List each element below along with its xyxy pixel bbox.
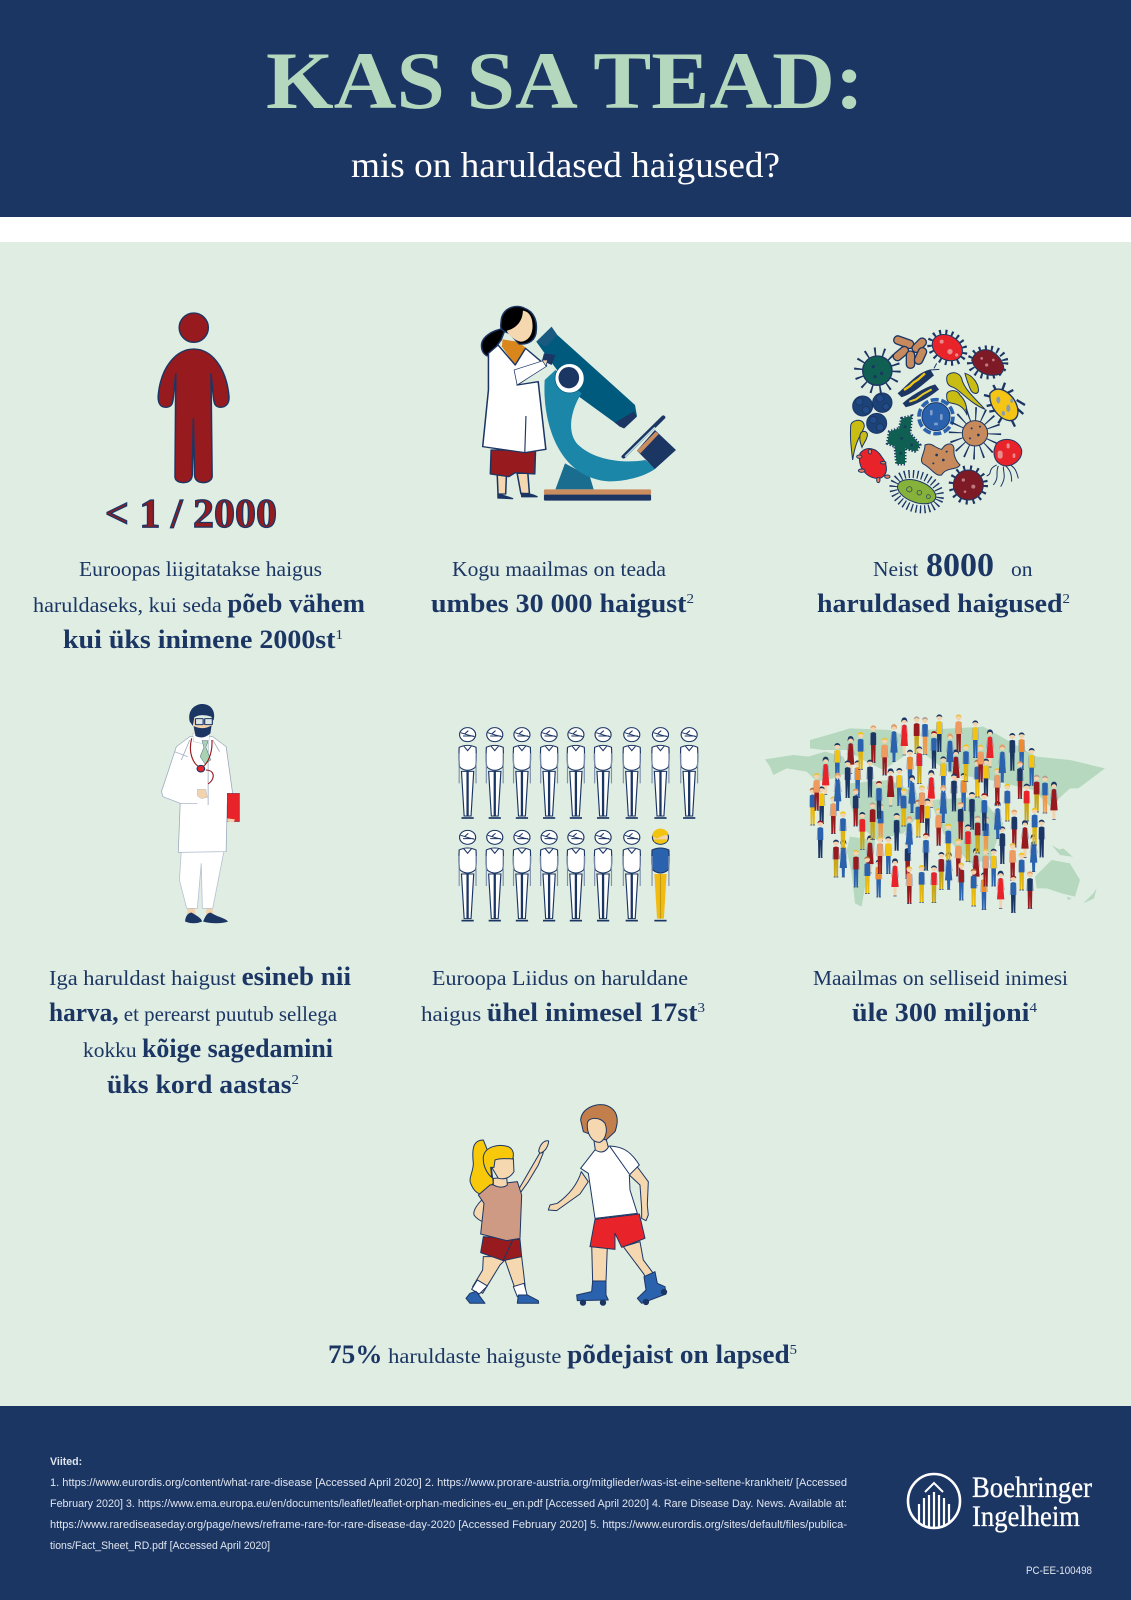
statistic: less than 1 in 2000: < 1 / 2000: [105, 490, 277, 536]
icon: red person: [158, 313, 229, 483]
head: [194, 718, 212, 737]
text: definition: haruldaseks, kui seda põeb vähem: [33, 589, 365, 618]
tan spiky star: [956, 415, 994, 452]
references: 1. https://www.eurordis.org/content/what-rare-disease [Accessed April 2020] 2. https://www.prorare-austria.org/mitglieder/was-ist-eine-seltene-krankheit/ [Accessed: [50, 1477, 847, 1489]
references: February 2020] 3. https://www.ema.europa.eu/en/documents/leaflet/leaflet-orphan-medicines-eu_en.pdf [Accessed April 2020] 4. Rare Disease Day. News. Available at:: [50, 1498, 847, 1510]
yellow bug: [984, 383, 1025, 427]
trousers: [179, 850, 224, 908]
text: 30 000 diseases: 2: [686, 592, 694, 607]
caterpillars: [898, 363, 939, 407]
text: family doctor: kokku kõige sagedamini: [83, 1034, 333, 1063]
text: 300 million: [813, 966, 1068, 1027]
icon: scientist with microscope: [482, 306, 676, 501]
blue clusters: [853, 393, 892, 433]
logo: Boehringer Ingelheim: [908, 1471, 1092, 1533]
text: 30 000 diseases: Kogu maailmas on teada: [452, 557, 666, 581]
red balloon: [987, 439, 1022, 487]
logo: Boehringer Ingelheim: Boehringer: [972, 1471, 1092, 1504]
text: 300 million: 4: [1029, 1001, 1037, 1016]
crowd: [809, 714, 1058, 913]
text: 8000 rare: Neist: [873, 557, 918, 581]
text: 1 in 17: [421, 966, 705, 1027]
neck and tie: [193, 733, 210, 743]
text: 300 million: üle 300 miljoni: [852, 998, 1017, 1027]
icon: doctor: [161, 704, 240, 923]
boy: [548, 1105, 667, 1305]
microscope: [536, 327, 676, 501]
text: definition: [33, 557, 365, 654]
main green panel: [0, 242, 1131, 1406]
text: 75 percent: 75% haruldaste haiguste põdejaist on lapsed: [328, 1340, 779, 1369]
text: 300 million: Maailmas on selliseid inimesi: [813, 966, 1068, 990]
world map: [765, 727, 1105, 907]
tan capsules: [892, 335, 928, 368]
text: 8000 rare: haruldased haigused: [817, 589, 1046, 618]
clipboard: [227, 793, 240, 822]
references: [50, 1456, 847, 1552]
text: family doctor: 2: [292, 1073, 299, 1088]
icon: two children: [466, 1105, 667, 1305]
coat: [161, 737, 233, 852]
text: 1 in 17: 3: [697, 1001, 705, 1016]
icon: 17 people with one highlighted: [459, 728, 698, 921]
hand: [197, 789, 207, 799]
footer band: [0, 1406, 1131, 1600]
references: https://www.rarediseaseday.org/page/news/reframe-rare-for-rare-disease-day-2020 [Accessed February 2020] 5. https://www.eurordis.org/sites/default/files/publica-: [50, 1519, 847, 1531]
text: family doctor: üks kord aastas: [107, 1070, 280, 1099]
references: tions/Fact_Sheet_RD.pdf [Accessed April 2020]: [50, 1540, 270, 1552]
girl: [466, 1140, 549, 1303]
title: KAS SA TEAD:: [266, 35, 864, 126]
text: 30 000 diseases: [431, 557, 694, 618]
text: 75 percent: 5: [790, 1343, 797, 1358]
blue virus: [919, 400, 953, 434]
text: 1 in 17: Euroopa Liidus on haruldane: [432, 966, 688, 990]
green hairy oval: [888, 468, 945, 516]
text: definition: Euroopas liigitatakse haigus: [79, 557, 322, 581]
scientist: [482, 306, 548, 499]
green virus: [859, 352, 896, 389]
stethoscope: [190, 738, 213, 784]
references: Viited:: [50, 1456, 82, 1468]
red spiky microbe: [925, 327, 970, 369]
logo: Boehringer Ingelheim: Ingelheim: [972, 1500, 1080, 1533]
text: definition: 1: [335, 628, 343, 643]
icon: circle of microbes: [850, 327, 1025, 516]
text: definition: kui üks inimene 2000st: [63, 625, 317, 654]
text: 1 in 17: haigus ühel inimesel 17st: [421, 998, 683, 1027]
text: family doctor: Iga haruldast haigust esineb nii: [49, 962, 351, 991]
logo mark: [908, 1474, 960, 1528]
header band: [0, 0, 1131, 217]
dark red virus: [952, 468, 985, 502]
text: 8000 rare: [817, 547, 1070, 618]
olive tadpoles: [850, 373, 985, 460]
text: 30 000 diseases: umbes 30 000 haigust: [431, 589, 669, 618]
document code: PC-EE-100498: [1026, 1565, 1092, 1577]
text: family doctor: harva, et perearst puutub sellega: [49, 998, 337, 1027]
text: 8000 rare: 8000: [926, 547, 994, 584]
dark red microbe: [970, 348, 1005, 376]
text: family doctor: [49, 962, 351, 1099]
red blob: [857, 448, 890, 483]
green branching microbe: [887, 416, 920, 464]
text: 8000 rare: on: [1011, 557, 1033, 581]
subtitle: mis on haruldased haigused?: [351, 145, 780, 185]
chart: world map with crowd: [765, 714, 1105, 913]
text: 8000 rare: 2: [1062, 592, 1070, 607]
tan blob: [921, 444, 960, 475]
